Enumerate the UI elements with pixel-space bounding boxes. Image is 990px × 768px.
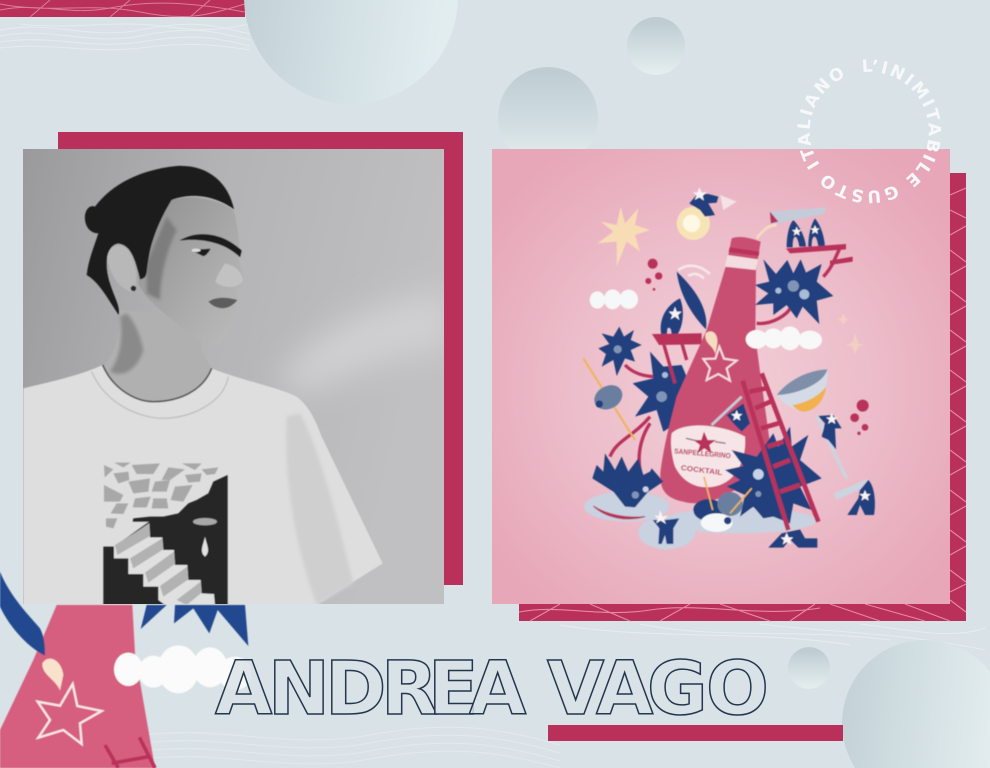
photo: Andrea Vago portrait [23, 149, 450, 605]
knife on platform [770, 207, 827, 223]
shirt print: black face [103, 475, 228, 605]
burst star: left big [633, 352, 687, 432]
olive upper left with toothpick [583, 358, 635, 440]
platform [786, 244, 853, 265]
label text: brand: SANPELLEGRINO [674, 446, 731, 460]
eyebrow and eye [179, 234, 242, 257]
crop star outline [38, 684, 102, 744]
mouth [208, 298, 237, 308]
figures on platform [787, 218, 825, 247]
shirt print: stair risers [115, 524, 202, 605]
illustration: Sanpellegrino bottle cocktail [583, 187, 875, 549]
shirt print: eye and tear [193, 518, 217, 557]
puddle [584, 492, 817, 549]
crop ladder [105, 737, 155, 768]
burst star: bottom right [725, 427, 822, 523]
sphere: mid [498, 67, 598, 167]
olives bottom with toothpicks [693, 477, 752, 532]
earring [131, 286, 136, 291]
crop navy wing [0, 572, 45, 656]
crimson frame behind artwork [519, 173, 966, 621]
hair [85, 166, 234, 315]
red pipes [610, 248, 840, 470]
collar shadow [103, 365, 212, 402]
crop peach drop [42, 659, 63, 691]
burst star: left small [598, 327, 642, 376]
illustration crop: bottom-left bottle [0, 572, 252, 768]
figure right [847, 480, 875, 515]
eye highlight [191, 249, 201, 252]
crop navy spikes [141, 605, 248, 646]
t-shirt [23, 365, 383, 605]
sphere: top small [627, 17, 685, 75]
figure bottom left [653, 518, 679, 544]
ladder left with figure [655, 272, 706, 383]
figure with camera [689, 194, 737, 217]
faint peach sparkles [837, 313, 864, 354]
figure bottom [768, 529, 817, 548]
star outline on bottle [703, 347, 737, 381]
name title: ANDREA VAGO [215, 646, 769, 732]
crop bottle [0, 605, 155, 768]
crimson frame behind photo [58, 132, 463, 585]
nose [215, 263, 243, 287]
label text: cocktail: COCKTAIL [680, 463, 723, 477]
wave pattern: top left [0, 24, 250, 50]
circular text badge: L’INIMITABILE GUSTO ITALIANO [798, 60, 942, 204]
wave pattern: below right frame [560, 624, 985, 650]
peach stem from bottle [757, 225, 777, 238]
shirt print [103, 463, 228, 605]
neck shadow [110, 313, 143, 374]
red dots [645, 259, 662, 291]
shirt print: stones [104, 463, 218, 528]
bottle label [671, 426, 745, 487]
red pool stroke [593, 506, 645, 519]
light bulb [677, 207, 710, 240]
painter figure with brush [712, 397, 750, 432]
cloud: right [746, 326, 822, 350]
sparkles [654, 187, 871, 545]
wavy white strokes [678, 266, 710, 278]
shirt fold shading [286, 413, 353, 605]
peach drop [705, 331, 717, 354]
ear [107, 246, 136, 292]
shirt print: stairs light [114, 523, 215, 605]
face [138, 196, 240, 326]
bottle neck stripe [729, 247, 759, 256]
cocktail glass [777, 369, 868, 500]
burst star: bottom left [592, 453, 663, 507]
sphere: top large [244, 0, 458, 104]
red dots right [850, 400, 869, 435]
figure on glass stem [818, 415, 842, 449]
bottle neck label [725, 255, 758, 270]
collar line [92, 372, 228, 418]
neck [104, 310, 160, 401]
panel: pink artwork [492, 149, 950, 604]
wave pattern: bottom [145, 727, 560, 768]
knife handle [770, 212, 778, 223]
bottle body [660, 237, 770, 503]
sphere: bottom small [788, 647, 830, 689]
bottom crimson bar [548, 725, 843, 741]
cloud: left [590, 289, 638, 309]
ladder right [743, 373, 818, 530]
burst star: peach [597, 207, 650, 267]
sphere: bottom right large [842, 640, 990, 768]
crop white cloud [114, 645, 252, 693]
top left crimson bar [0, 0, 245, 17]
shaved side shade [147, 217, 177, 300]
burst star: upper right [755, 259, 833, 324]
